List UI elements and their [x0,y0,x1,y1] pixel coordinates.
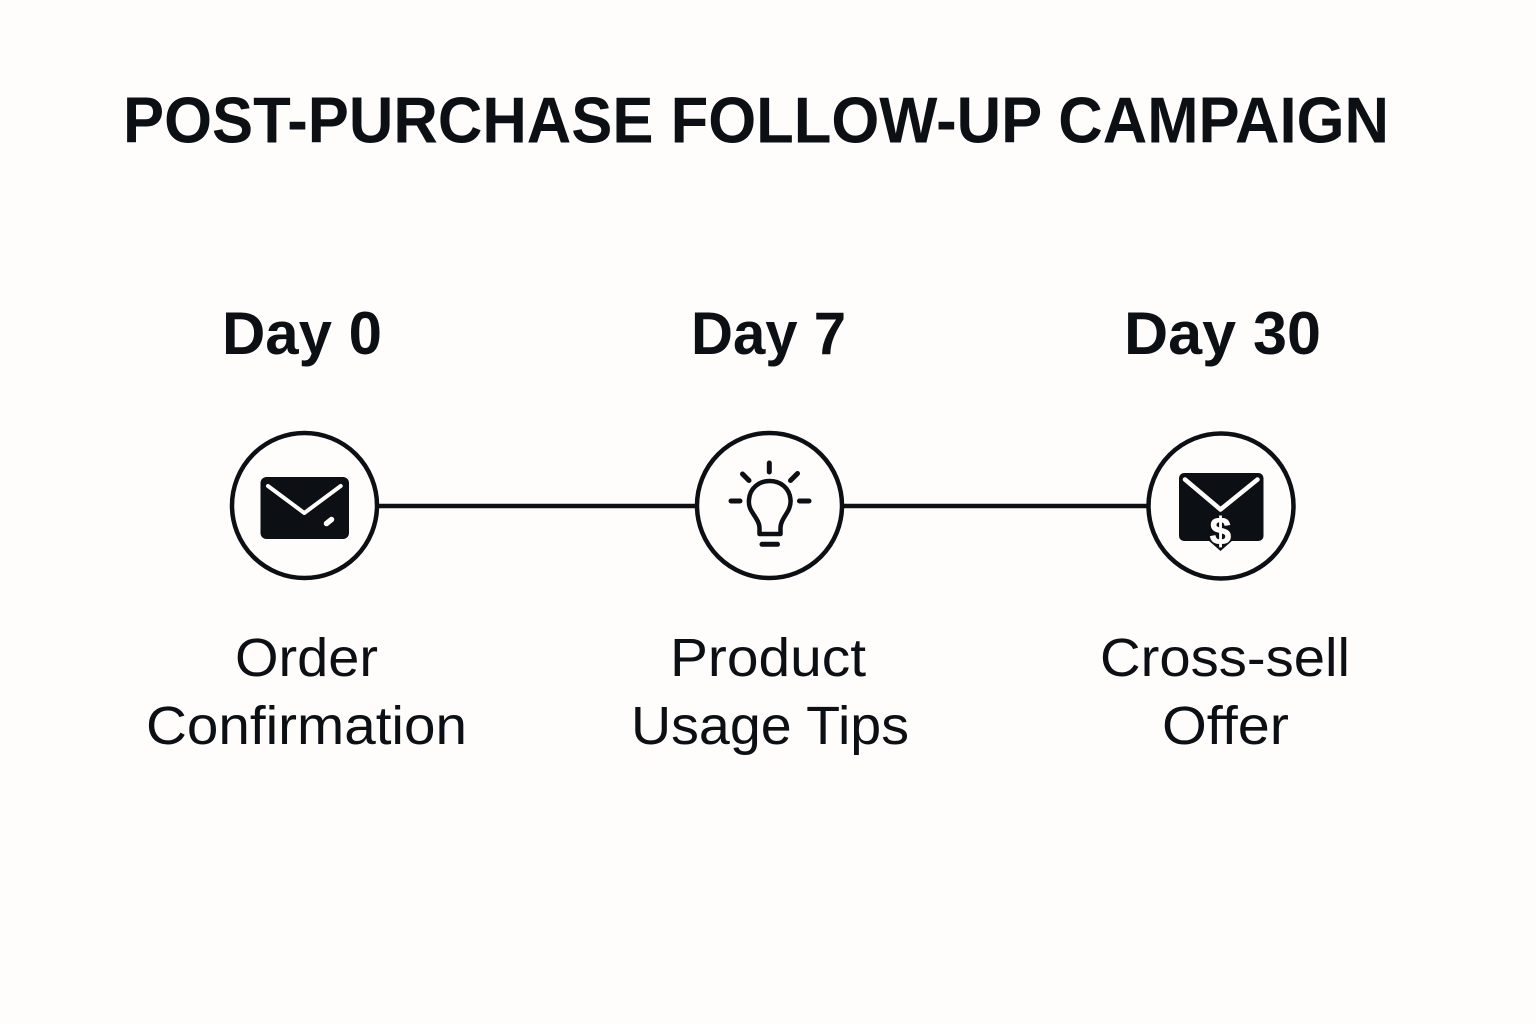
day 7 label [631,628,909,756]
day 0 label: Confirmation [146,696,467,756]
day 7 label: Product [670,628,866,688]
timeline connector: day 7 to day 30 [843,504,1147,508]
day 7 label: Usage Tips [631,696,909,756]
icon: envelope with dollar in circle: $ [1210,511,1231,553]
day 30 label [1100,628,1350,756]
step: day 30 [1100,300,1350,756]
day 0 heading: Day 0 [222,300,382,367]
day 30 heading: Day 30 [1124,300,1321,367]
day 0 label: Order [235,628,378,688]
icon: envelope with dollar in circle [1148,434,1294,578]
step: day 0 [146,300,467,756]
timeline connector: day 0 to day 7 [378,504,696,508]
icon: envelope in circle [232,433,377,578]
day 30 label: Cross-sell [1100,628,1350,688]
icon: light bulb in circle [697,433,842,578]
day 7 heading: Day 7 [691,300,846,367]
day 0 label [146,628,467,756]
step: day 7 [631,300,909,756]
title: POST-PURCHASE FOLLOW-UP CAMPAIGN [123,84,1389,156]
day 30 label: Offer [1162,696,1289,756]
